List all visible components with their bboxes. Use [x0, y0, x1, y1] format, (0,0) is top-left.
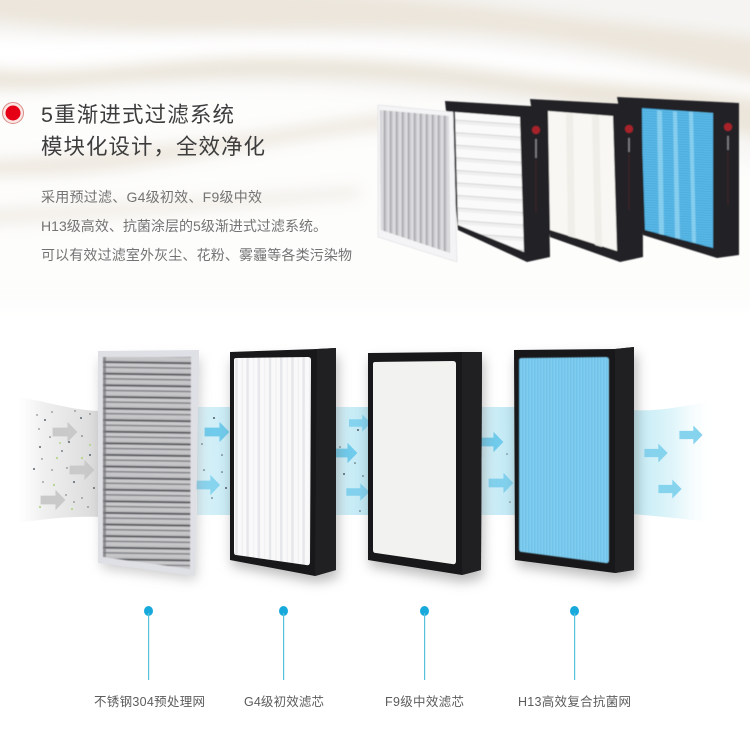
airflow: stream between filters 2 and 3: [333, 407, 371, 515]
callout: F9 filter: F9级中效滤芯: [385, 694, 464, 709]
title: 5重渐进式过滤系统: [41, 103, 234, 127]
filter: H13 blue, angled: [617, 97, 739, 258]
filter: stainless pre-filter, angled: [378, 105, 457, 262]
description text: 可以有效过滤室外灰尘、花粉、雾霾等各类污染物: [41, 247, 352, 263]
icon: blue arrows: [479, 432, 513, 493]
airflow: polluted grey stream: [18, 397, 100, 523]
filter 4: H13 blue antibacterial: [514, 347, 637, 580]
callout: F9 filter: [385, 606, 464, 709]
description text: [41, 189, 352, 263]
icon: grey arrows: [41, 422, 94, 510]
description text: H13级高效、抗菌涂层的5级渐进式过滤系统。: [41, 218, 327, 234]
airflow: stream between filters 1 and 2: [196, 407, 232, 515]
filter 3: F9 white: [368, 352, 484, 582]
icon: clean air arrows: [644, 425, 703, 499]
icon: blue arrows: [333, 414, 371, 501]
particles: pollen: [39, 442, 91, 510]
filter: G4 pleated, angled: [445, 101, 550, 262]
particles: dust: [33, 410, 95, 508]
callout: G4 filter: G4级初效滤芯: [244, 694, 324, 709]
particles: [201, 417, 227, 499]
product photo: four filters in perspective: [378, 97, 739, 262]
airflow: clean air stream: [632, 400, 716, 522]
filter 1: stainless steel mesh: [98, 350, 200, 580]
filter 2: G4 pleated: [230, 348, 338, 582]
callout: G4 filter: [244, 606, 324, 709]
particles: [339, 429, 364, 512]
title: [41, 103, 265, 159]
background: cream silk waves: [0, 0, 750, 362]
callout: H13 filter: H13高效复合抗菌网: [518, 694, 631, 709]
airflow: stream between filters 3 and 4: [479, 407, 517, 515]
icon: blue arrows: [196, 422, 229, 495]
icon: red bullet: [2, 102, 24, 124]
callout: stainless steel mesh: 不锈钢304预处理网: [94, 694, 205, 709]
filter: F9 white, angled: [530, 99, 643, 262]
callout: stainless steel mesh: [94, 606, 205, 709]
title: 模块化设计，全效净化: [41, 135, 265, 159]
description text: 采用预过滤、G4级初效、F9级中效: [41, 189, 262, 205]
callout: H13 filter: [518, 606, 631, 709]
particles: [506, 453, 511, 503]
